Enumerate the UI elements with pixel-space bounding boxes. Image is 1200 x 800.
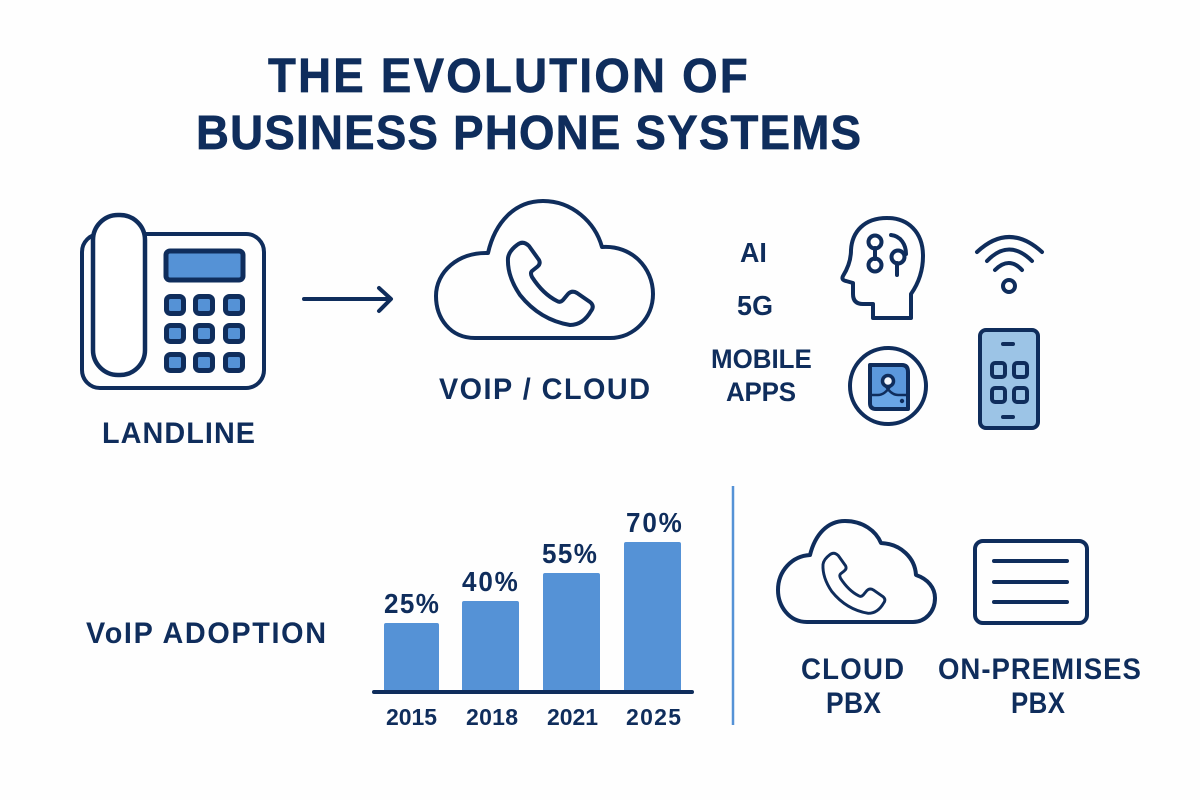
icon: cloud with phone handset [436, 201, 653, 338]
label: voip / cloud: VOIP / CLOUD [439, 372, 650, 406]
label: on-premises pbx: ON-PREMISES [938, 653, 1141, 686]
year labels: 2021 [547, 704, 598, 730]
title: THE EVOLUTION OF [268, 49, 748, 102]
title: BUSINESS PHONE SYSTEMS [196, 106, 861, 159]
label: mobile apps: MOBILE [711, 344, 812, 374]
label: mobile apps: APPS [726, 377, 796, 407]
label: on-premises pbx: PBX [1011, 686, 1065, 719]
title [196, 49, 861, 159]
label: landline: LANDLINE [102, 416, 255, 450]
icon: wifi signal [977, 237, 1042, 292]
value labels: 25% [384, 588, 439, 619]
icon: circular disk badge [850, 348, 926, 424]
label: AI: AI [740, 236, 767, 268]
value labels: 70% [626, 507, 682, 538]
year labels: 2025 [626, 704, 681, 730]
icon: AI head with circuits [842, 218, 923, 318]
icon: cloud pbx [778, 521, 935, 622]
icon: landline desk phone [82, 215, 264, 388]
label: mobile apps [711, 344, 812, 407]
label: on-premises pbx [938, 653, 1141, 719]
label: cloud pbx: PBX [826, 685, 881, 719]
value labels [384, 507, 682, 619]
icon: on-premises pbx box [975, 541, 1087, 623]
bar 2025 [624, 542, 681, 692]
bar 2021 [543, 573, 600, 692]
bar chart: voip adoption by year [374, 507, 692, 730]
icon: smartphone with apps [980, 330, 1038, 428]
bar 2018 [462, 601, 519, 692]
label: cloud pbx: CLOUD [801, 653, 904, 686]
label: 5G: 5G [737, 289, 773, 321]
value labels: 40% [462, 566, 518, 597]
bar 2015 [384, 623, 439, 692]
chart baseline [374, 690, 692, 694]
label: voip adoption: VoIP ADOPTION [86, 616, 326, 650]
year labels [386, 704, 681, 730]
year labels: 2015 [386, 704, 437, 730]
label: cloud pbx [801, 653, 904, 719]
year labels: 2018 [466, 704, 518, 730]
value labels: 55% [542, 538, 597, 569]
arrow: landline to cloud [304, 288, 391, 311]
